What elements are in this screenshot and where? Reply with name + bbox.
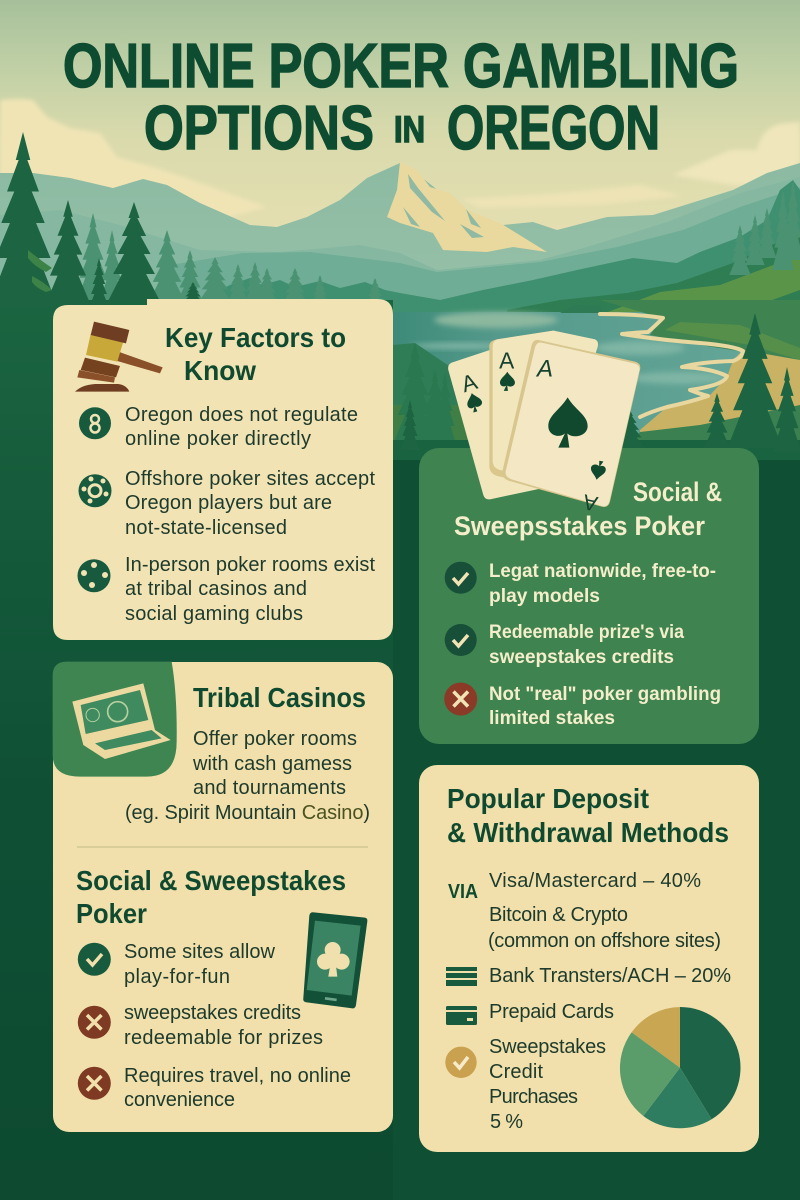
text: sweepstakes credits: sweepstakes credits [124,1002,301,1024]
text: sweepstakes credits [124,1002,323,1049]
text: in-person: at tribal casinos and [125,578,307,600]
heading: social and sweepstakes poker [454,477,722,541]
icon: poker chip [78,474,112,507]
text: regulation [125,404,358,450]
text: sweepstakes credits: redeemable for prizes [124,1027,323,1049]
text: sweepstakes credit purchases: Credit [489,1061,543,1083]
icon: playing cards: A [458,368,481,397]
heading: social and sweepstakes: Poker [76,898,147,929]
text: visa and crypto: Bitcoin & Crypto [489,904,628,926]
text: offshore: not-state-licensed [125,517,287,539]
icon: cross [444,682,477,716]
text: play for fun [124,941,276,988]
heading: deposit and withdrawal: Popular Deposit [447,783,649,814]
text: sweepstakes credit purchases: Sweepstakes [489,1036,606,1058]
text: sweepstakes credit purchases: Purchases [489,1086,578,1108]
heading: social and sweepstakes poker: Sweepsstakes Poker [454,511,705,541]
text: requires travel: Requires travel, no online [124,1065,351,1087]
icon: check [78,943,111,976]
text: not real gambling: limited stakes [489,708,615,729]
heading: social and sweepstakes [76,865,346,929]
heading: deposit and withdrawal [447,783,729,848]
text: redeemable prizes [489,622,684,668]
heading: social and sweepstakes: Social & Sweepstakes [76,865,346,896]
text: offshore: Offshore poker sites accept [125,468,375,490]
icon: playing cards: A [580,489,600,516]
text: prepaid cards: Prepaid Cards [489,1001,614,1023]
text: visa and crypto: Visa/Mastercard – 40% [489,870,701,892]
heading: key factors [165,322,346,386]
text: redeemable prizes: sweepstakes credits [489,647,674,668]
text: tribal casinos: Offer poker rooms [193,728,357,750]
panel: deposit and withdrawal methods [419,765,759,1152]
icon: check [445,562,477,594]
text: tribal casinos: and tournaments [193,777,346,799]
icon: playing cards: A [535,356,553,383]
icon: laptop on green blob [53,662,177,777]
icon: via card label: VIA [448,881,478,903]
text: redeemable prizes: Redeemable prize's via [489,622,684,643]
heading: tribal casinos: Tribal Casinos [193,682,366,713]
text: not real gambling [489,684,721,729]
panel: social and sweepstakes poker green [419,331,759,744]
text: tribal casinos: (eg. Spirit Mountain Casino) [125,802,370,824]
text: in-person [125,554,375,625]
icon: prepaid card [446,1006,477,1025]
text: regulation: Oregon does not regulate [125,404,358,426]
text: offshore: Oregon players but are [125,492,332,514]
text: play for fun: Some sites allow [124,941,276,963]
icon: playing cards [448,331,640,516]
title: IN [394,109,425,150]
text: legal nationwide: Legat nationwide, free-to- [489,561,716,582]
text: bank transfers: Bank Transters/ACH – 20% [489,965,731,987]
icon: dollar badge [79,407,111,439]
text: legal nationwide [489,561,716,607]
title [63,32,739,163]
text: sweepstakes credit purchases: 5% [490,1111,523,1133]
icon: playing cards: A [499,347,515,373]
icon: cross [78,1067,111,1100]
text: in-person: In-person poker rooms exist [125,554,375,576]
heading: social and sweepstakes poker: Social & [633,477,722,507]
icon: stars chip [78,559,110,592]
heading: deposit and withdrawal: & Withdrawal Methods [447,817,729,848]
text: offshore [125,468,375,539]
text: requires travel: convenience [124,1089,235,1111]
panel: tribal casinos and social poker [53,662,393,1132]
heading: key factors: Key Factors to [165,322,346,353]
icon: gavel [75,322,163,392]
title: OPTIONS [144,94,374,163]
heading: key factors: Know [184,355,256,386]
icon: bank bars [446,967,477,986]
pie chart [620,1007,741,1128]
panel: key factors [53,299,393,640]
text: visa and crypto [488,870,721,952]
title: OREGON [447,94,660,163]
icon: check [445,624,477,656]
icon: cross [78,1006,111,1039]
text: tribal casinos [125,728,370,824]
text: tribal casinos: with cash gamess [192,753,352,775]
text: play for fun: play-for-fun [124,966,230,988]
text: requires travel [124,1065,351,1111]
icon: phone [303,912,367,1008]
text: in-person: social gaming clubs [125,603,303,625]
text: regulation: online poker directly [125,428,311,450]
text: visa and crypto: (common on offshore sites) [488,930,721,952]
text: sweepstakes credit purchases [489,1036,606,1133]
icon: gold check [445,1047,477,1078]
text: legal nationwide: play models [489,586,600,607]
text: not real gambling: Not "real" poker gambling [489,684,721,705]
